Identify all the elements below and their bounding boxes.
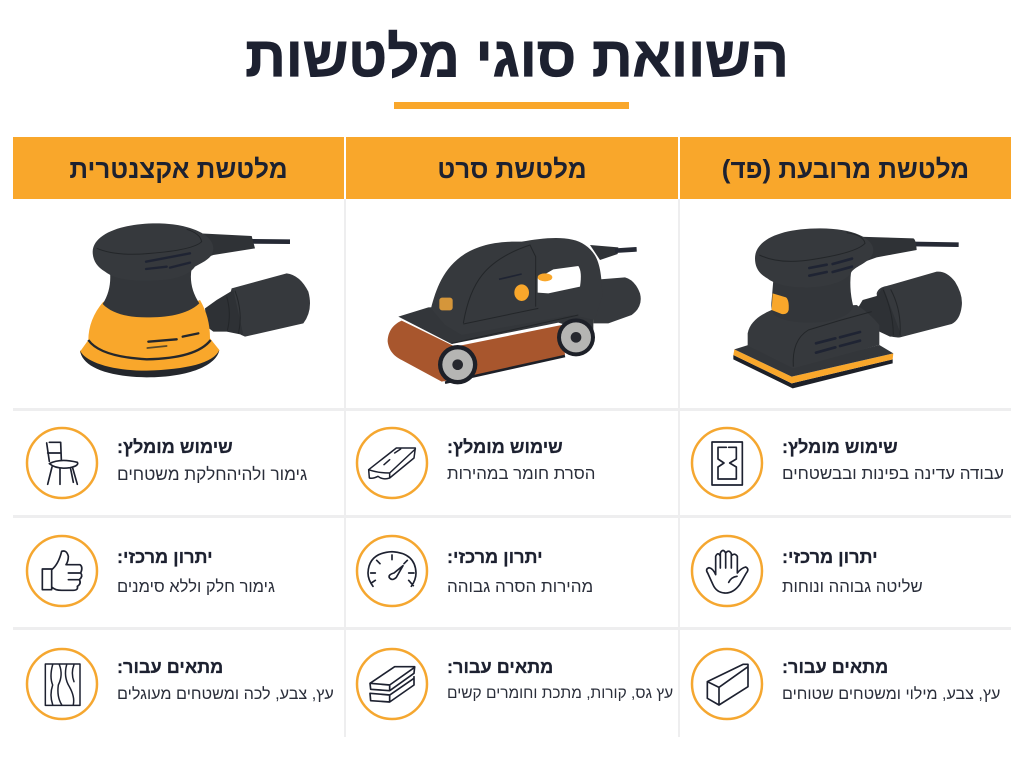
illustration: square pad sander (733, 228, 962, 388)
label: recommended use: שימוש מומלץ: (117, 437, 233, 457)
label: key advantage: יתרון מרכזי: (782, 547, 878, 567)
text: recommended use: גימור ולהיהחלקת משטחים (117, 464, 307, 484)
label: recommended use: שימוש מומלץ: (447, 437, 563, 457)
heading: orbital sander: מלטשת אקצנטרית (69, 154, 288, 184)
text: key advantage: מהירות הסרה גבוהה (447, 577, 593, 596)
panel: belt sander (346, 137, 678, 720)
label: key advantage: יתרון מרכזי: (117, 547, 213, 567)
illustration: belt sander (388, 238, 641, 384)
label: suitable for: מתאים עבור: (782, 657, 888, 677)
title: השוואת סוגי מלטשות (245, 25, 789, 88)
heading: square sander: מלטשת מרובעת (פד) (722, 154, 969, 184)
heading: orbital sander (13, 137, 344, 199)
row: key advantage (356, 534, 593, 608)
text: suitable for: עץ גס, קורות, מתכת וחומרים קשים (447, 685, 673, 702)
heading: belt sander: מלטשת סרט (437, 154, 587, 184)
row: recommended use (26, 426, 307, 500)
row: suitable for (26, 648, 334, 720)
text: suitable for: עץ, צבע, מילוי ומשטחים שטוחים (782, 685, 1000, 703)
icon: chair (26, 426, 98, 500)
row: recommended use (690, 426, 1004, 500)
panel: square pad sander (680, 137, 1011, 720)
icon: wood block (690, 648, 764, 720)
icon: stacked boards (356, 648, 428, 720)
text: suitable for: עץ, צבע, לכה ומשטחים מעוגלים (117, 685, 334, 703)
icon: open hand (690, 534, 764, 608)
text: recommended use: הסרת חומר במהירות (447, 464, 595, 483)
title underline (394, 102, 629, 109)
label: recommended use: שימוש מומלץ: (782, 437, 898, 457)
label: suitable for: מתאים עבור: (447, 657, 553, 677)
heading: square sander (680, 137, 1011, 199)
row: suitable for (356, 648, 673, 720)
icon: rough wood plank (356, 426, 428, 500)
row: key advantage (26, 534, 275, 608)
label: key advantage: יתרון מרכזי: (447, 547, 543, 567)
panel: random orbital sander (13, 137, 344, 720)
illustration: random orbital sander (80, 223, 310, 378)
heading: belt sander (346, 137, 678, 199)
row: recommended use (356, 426, 595, 500)
icon: speedometer (356, 534, 428, 608)
text: recommended use: עבודה עדינה בפינות ובבשטחים (782, 464, 1004, 483)
text: key advantage: גימור חלק וללא סימנים (117, 578, 275, 596)
row: key advantage (690, 534, 923, 608)
label: suitable for: מתאים עבור: (117, 657, 223, 677)
row: suitable for (690, 648, 1000, 720)
text: key advantage: שליטה גבוהה ונוחות (782, 577, 923, 596)
icon: door panel (690, 426, 764, 500)
icon: wood grain (26, 648, 98, 720)
icon: thumbs up (26, 534, 98, 608)
